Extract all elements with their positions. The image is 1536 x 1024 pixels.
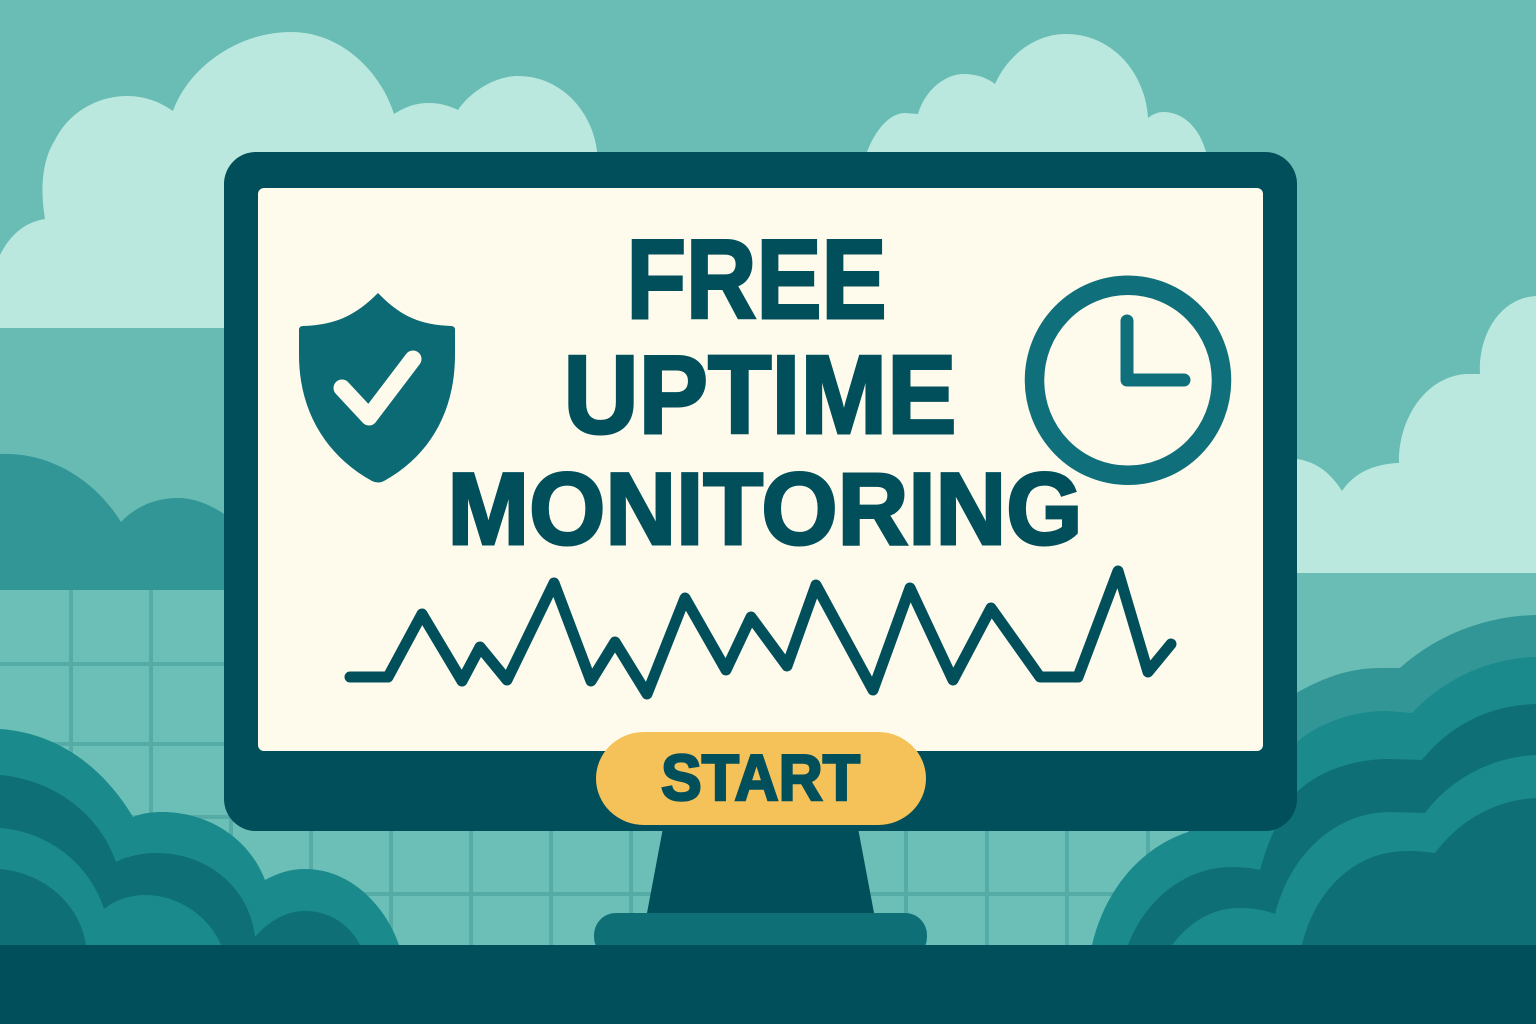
cloud: upper middle: [867, 34, 1206, 152]
monitor stand neck: [647, 828, 874, 913]
title: MONITORING: [448, 452, 1082, 566]
tile grid wall: [0, 590, 1290, 946]
bushes: lower right: [1092, 615, 1536, 945]
cloud: right: [1290, 296, 1536, 573]
uptime sparkline: [350, 571, 1171, 694]
background band: [0, 328, 230, 590]
icon: shield with check: [299, 293, 455, 482]
ground strip: [0, 945, 1536, 1024]
bushes: lower left: [0, 729, 399, 945]
title: FREE: [626, 217, 886, 342]
monitor stand base: [594, 913, 927, 959]
monitor screen: [258, 188, 1263, 751]
cloud: upper left: [0, 32, 597, 328]
start button: START: [661, 741, 860, 814]
icon: clock: [1034, 285, 1222, 475]
start button: [596, 732, 926, 825]
monitor frame: [224, 152, 1297, 831]
distant bush: left: [0, 454, 230, 590]
title: UPTIME: [564, 333, 956, 457]
title: [448, 217, 1082, 566]
